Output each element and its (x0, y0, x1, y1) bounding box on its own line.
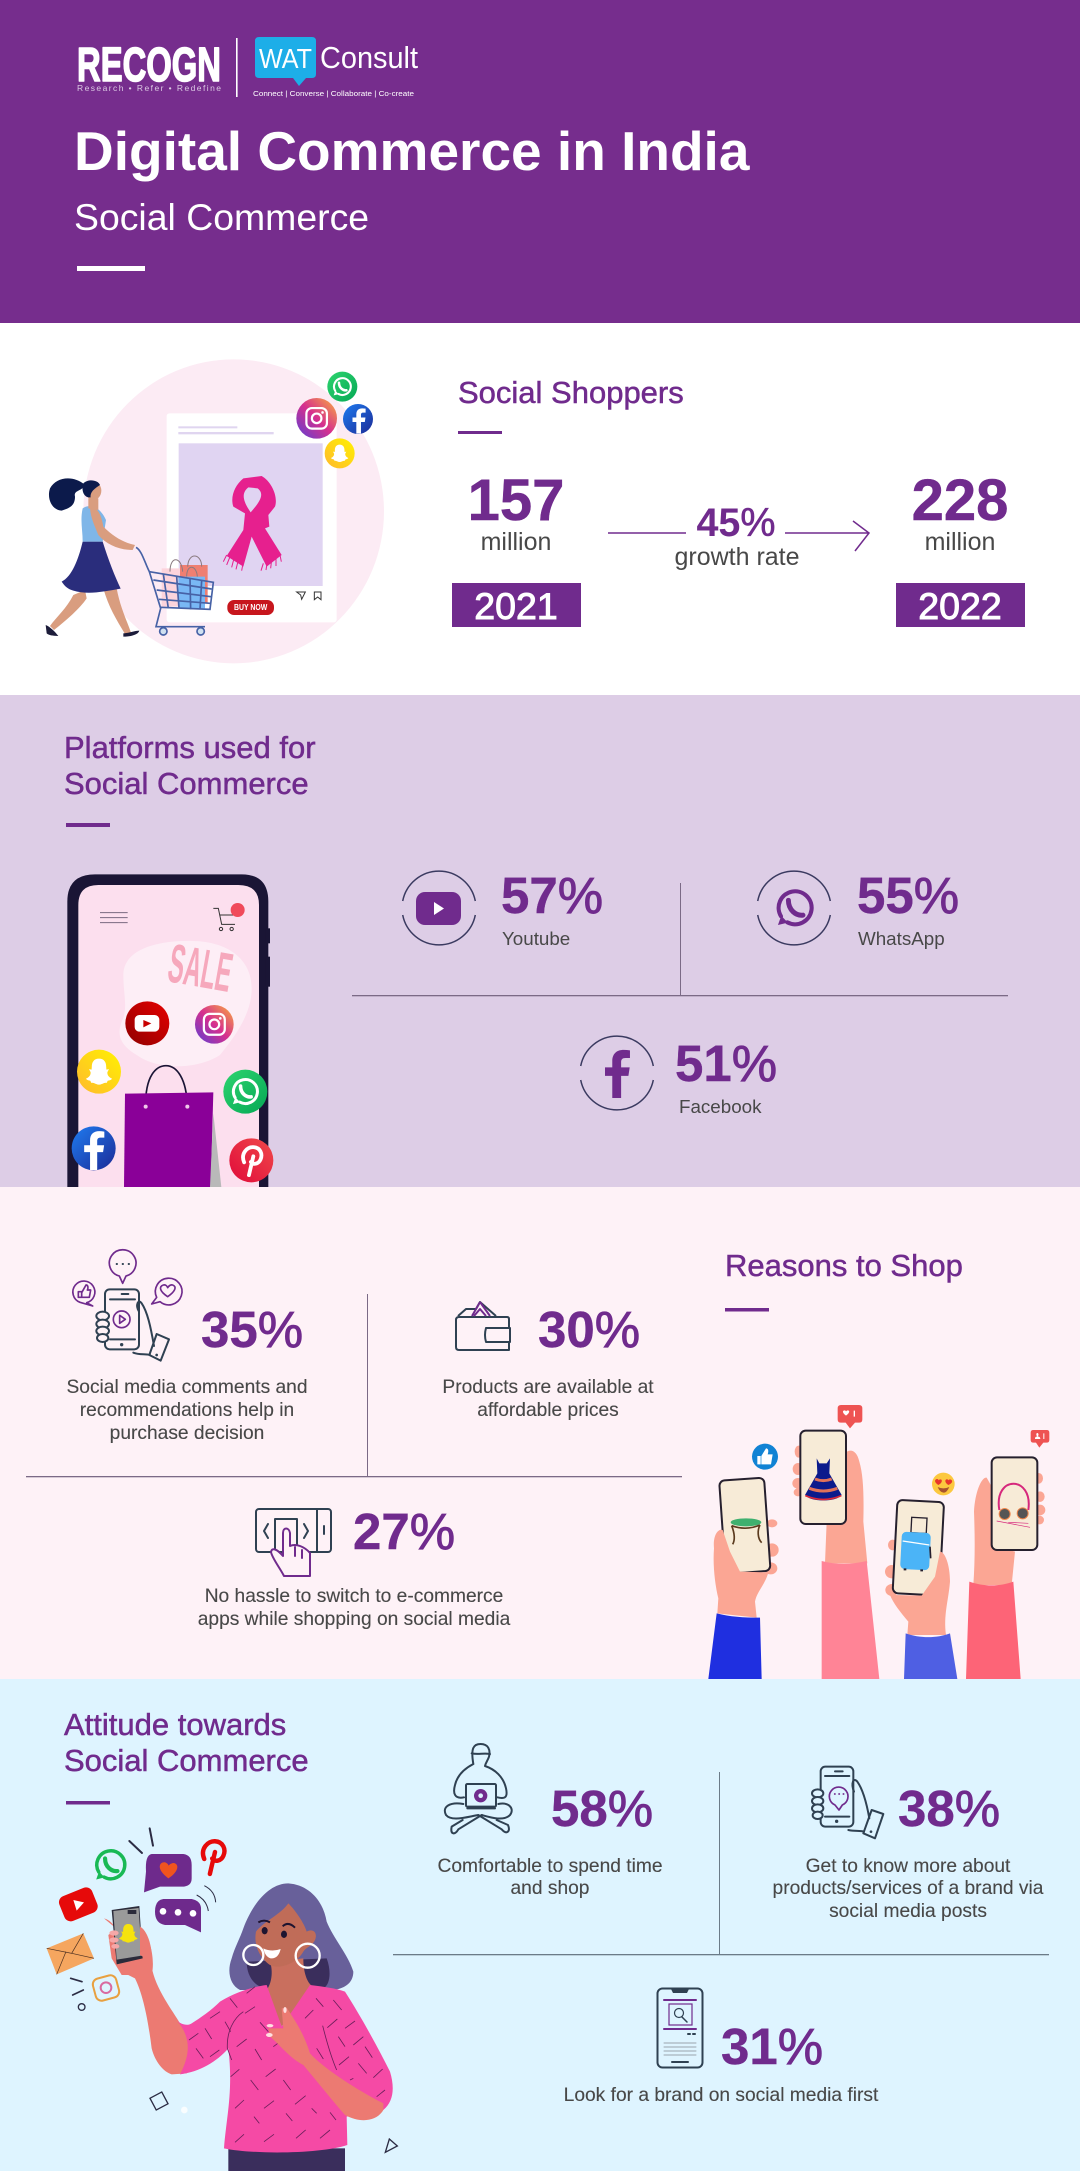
stat: brand posts 38%: Get to know more about (806, 1856, 1010, 1877)
stat: WhatsApp 55%: 55% (857, 867, 959, 924)
stat: Facebook 51%: Facebook (679, 1096, 762, 1117)
heading: social shoppers: Social Shoppers (458, 375, 684, 410)
stat: 2022 shoppers: 228 (912, 468, 1008, 533)
stat: 2021 shoppers: million (481, 528, 551, 556)
stat: growth rate with arrow: 45% (696, 501, 776, 545)
stat: search first 31%: Look for a brand on social media first (564, 2085, 879, 2106)
illustration: hands holding phones (708, 1405, 1049, 1679)
stat: search first 31% (564, 1988, 879, 2106)
illustration: phone with social icons (67, 874, 273, 1187)
logo: WAT Consult: Connect | Converse | Collaborate | Co-create (253, 89, 414, 98)
stat: comments 35% (66, 1250, 308, 1444)
icon: phone with message bubble (812, 1767, 883, 1838)
face (255, 1903, 316, 1967)
heading: reasons to shop: Reasons to Shop (725, 1248, 963, 1283)
hand 2 (792, 1446, 804, 1496)
stat: comfortable 58%: 58% (551, 1780, 653, 1837)
illustration: shopper with cart and social post (46, 359, 384, 663)
panel: header (0, 0, 1080, 323)
stat: switching 27% (198, 1503, 511, 1630)
stat: prices 30% (442, 1301, 654, 1421)
stat: YouTube 57% (403, 867, 603, 949)
heading: attitude: Social Commerce (64, 1743, 309, 1778)
stat: comfortable 58%: Comfortable to spend time (437, 1856, 663, 1877)
skirt (228, 2148, 345, 2171)
social icons cluster (327, 372, 357, 402)
stat: Facebook 51%: 51% (675, 1035, 777, 1092)
heading: platforms: Social Commerce (64, 766, 309, 801)
subtitle: Social Commerce (74, 196, 369, 238)
stat: WhatsApp 55% (758, 867, 959, 949)
stat: prices 30%: affordable prices (477, 1400, 619, 1421)
logo: WAT Consult: Consult (320, 40, 418, 75)
stat: WhatsApp 55%: WhatsApp (858, 928, 945, 949)
stat: 2022 shoppers: 2022 (918, 585, 1002, 627)
hair back (229, 1883, 353, 1990)
logo: Recogn (77, 39, 221, 93)
panel: reasons to shop (0, 1187, 1080, 1679)
reactions (838, 1405, 862, 1428)
icon: person with laptop (445, 1744, 512, 1833)
hand 1 (764, 1519, 779, 1574)
neck (267, 1958, 312, 2027)
stat: comments 35%: purchase decision (110, 1423, 264, 1444)
stat: brand posts 38%: products/services of a brand via (773, 1878, 1044, 1899)
panel: platforms (0, 695, 1080, 1187)
stat: brand posts 38%: social media posts (829, 1901, 987, 1922)
stat: 2021 shoppers (452, 468, 581, 627)
stat: YouTube 57%: 57% (501, 867, 603, 924)
woman (50, 590, 87, 630)
stat: comments 35%: Social media comments and (66, 1377, 308, 1398)
blouse (177, 1985, 393, 2152)
stat: switching 27%: 27% (353, 1503, 455, 1560)
panel: attitude (0, 1679, 1080, 2171)
cart (136, 547, 213, 627)
icon: tablet with tap hand (256, 1509, 331, 1576)
illustration: shopper with cart and social post: BUY NOW (234, 602, 268, 612)
stat: Facebook 51% (581, 1035, 777, 1117)
stat: YouTube 57%: Youtube (502, 928, 570, 949)
raised arm (122, 1967, 192, 2074)
heading: attitude: Attitude towards (64, 1707, 286, 1742)
stat: search first 31%: 31% (721, 2018, 823, 2075)
illustration: woman with phone and social icons (47, 1828, 397, 2171)
logo: Recogn: Research • Refer • Redefine (77, 83, 221, 93)
stat: growth rate with arrow (608, 501, 869, 571)
title: Digital Commerce in India (74, 120, 750, 182)
logo: WAT Consult (253, 37, 418, 98)
stat: switching 27%: No hassle to switch to e-commerce (205, 1586, 503, 1607)
other arm (268, 2008, 383, 2120)
illustration: phone with social icons: SALE (164, 932, 237, 1004)
logo: Recogn: RECOGN (77, 39, 221, 92)
icon: wallet (456, 1302, 510, 1350)
stat: switching 27%: apps while shopping on social media (198, 1609, 511, 1630)
logo: WAT Consult: WAT (259, 43, 312, 74)
phone and hand (104, 1918, 153, 1975)
icon: phone with search (658, 1988, 702, 2068)
heading: platforms: Platforms used for (64, 730, 316, 765)
stat: 2021 shoppers: 2021 (474, 585, 558, 627)
stat: brand posts 38% (773, 1767, 1044, 1922)
panel: social shoppers (0, 323, 1080, 695)
stat: 2022 shoppers: million (925, 528, 995, 556)
floating icons (96, 1851, 125, 1879)
icon: phone with reactions (73, 1250, 182, 1361)
stat: brand posts 38%: 38% (898, 1780, 1000, 1837)
stat: comfortable 58%: and shop (511, 1878, 589, 1899)
stat: 2021 shoppers: 157 (468, 468, 564, 533)
hand 3 (885, 1540, 899, 1596)
stat: prices 30%: 30% (538, 1301, 640, 1358)
stat: comments 35%: 35% (201, 1301, 303, 1358)
stat: prices 30%: Products are available at (442, 1377, 654, 1398)
bags (162, 568, 183, 607)
stat: comfortable 58% (437, 1744, 663, 1899)
stat: comments 35%: recommendations help in (80, 1400, 294, 1421)
hand 4 (1034, 1473, 1045, 1524)
stat: growth rate with arrow: growth rate (674, 543, 800, 571)
stat: 2022 shoppers (896, 468, 1025, 627)
